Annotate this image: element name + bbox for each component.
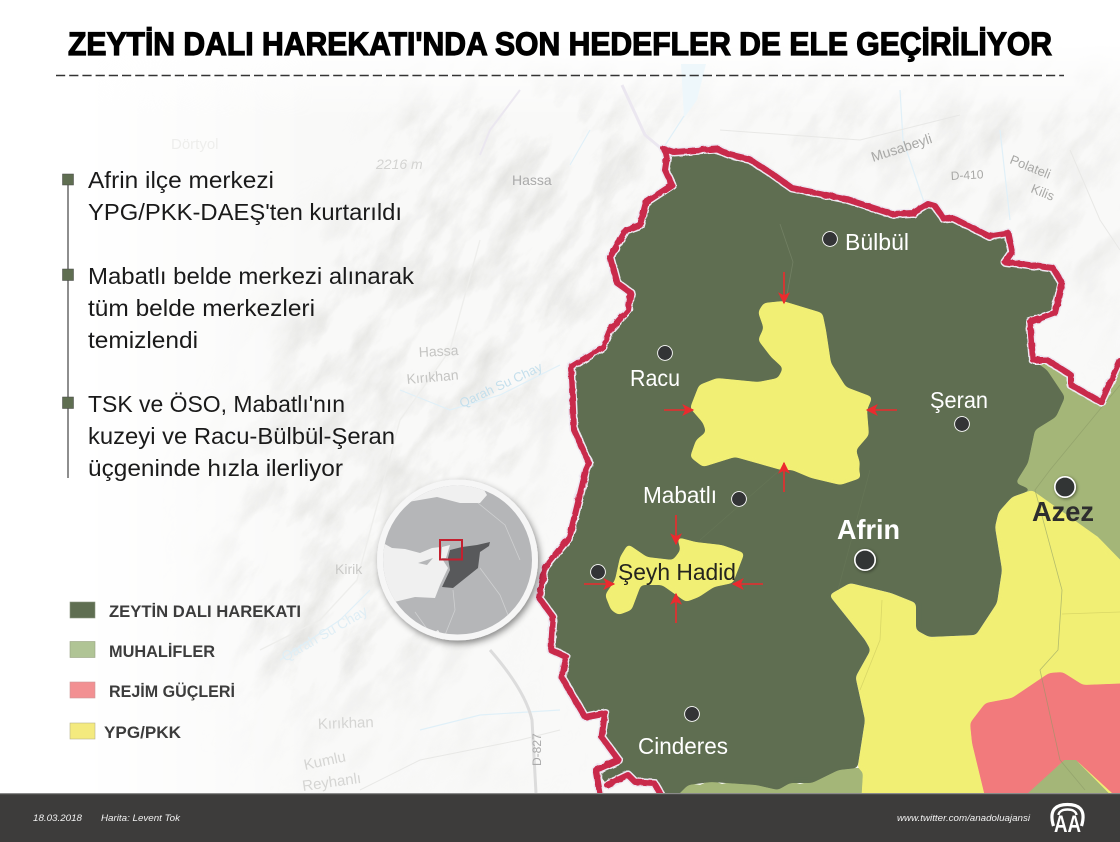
faint place names: Qarah Su Chay — [278, 602, 370, 665]
bullet: TSK and ÖSO: TSK ve ÖSO, Mabatlı'nın — [88, 391, 345, 417]
legend: YPG/PKK — [104, 723, 182, 742]
settlement labels: Mabatlı — [643, 482, 717, 508]
faint place names: Qarah Su Chay — [457, 359, 545, 411]
bullet: Mabatlı: tüm belde merkezleri — [88, 295, 315, 321]
settlement labels — [618, 229, 1094, 759]
footer date and credit: www.twitter.com/anadoluajansi — [897, 813, 1031, 824]
bullet: TSK and ÖSO: üçgeninde hızla ilerliyor — [88, 455, 343, 481]
faint place names: Kumlu — [302, 748, 347, 774]
inset locator globe — [370, 470, 538, 645]
faint place names: D-410 — [950, 167, 984, 183]
faint place names: 2216 m — [375, 156, 423, 172]
faint place names: Kırıkhan — [406, 367, 459, 387]
map background — [172, 64, 1120, 793]
red advance arrows — [584, 272, 897, 623]
settlement labels: Şeyh Hadid — [618, 559, 736, 585]
title divider — [56, 74, 1064, 76]
icon: Anadolu Agency logo: AA — [1054, 811, 1081, 838]
faint place names: Musabeyli — [869, 130, 934, 165]
bullet: TSK and ÖSO: kuzeyi ve Racu-Bülbül-Şeran — [88, 423, 395, 449]
footer date and credit: 18.03.2018 — [33, 813, 83, 824]
bullet: TSK and ÖSO — [62, 391, 395, 481]
area: yellow pocket south — [605, 537, 744, 615]
bullet list — [62, 167, 415, 481]
faint place names: Kirik — [335, 561, 363, 577]
faint place names: Kilis — [1029, 181, 1057, 204]
area: YPG/PKK east — [829, 490, 1120, 805]
area: muhalifler — [668, 360, 1120, 800]
icon: Anadolu Agency logo — [1052, 804, 1083, 838]
faint place names: Dörtyol — [171, 136, 219, 153]
title: ZEYTİN DALI HAREKATI'NDA SON HEDEFLER DE ELE GEÇİRİLİYOR — [68, 26, 1052, 62]
faint place names: Kırıkhan — [318, 714, 374, 733]
legend: REJİM GÜÇLERİ — [109, 682, 235, 701]
area: rejim güçleri — [970, 672, 1120, 805]
area: zeytin dalı harekatı — [539, 149, 1065, 800]
settlement labels: Racu — [630, 365, 680, 391]
afrin region border — [539, 149, 1120, 800]
faint place names — [171, 130, 1057, 795]
area: muhalifler south-east pocket — [1027, 760, 1110, 794]
settlement labels: Bülbül — [845, 229, 909, 255]
bullet: Afrin center — [62, 167, 402, 225]
settlement labels: Afrin — [837, 514, 900, 545]
bullet: Mabatlı — [62, 263, 415, 353]
footer bar — [0, 793, 1120, 842]
water and roads — [260, 64, 1120, 793]
faint place names: Reyhanlı — [301, 770, 362, 795]
faint place names: D-827 — [530, 733, 544, 766]
settlement dots — [591, 232, 1075, 721]
bullet: Mabatlı: Mabatlı belde merkezi alınarak — [88, 263, 415, 289]
faint place names: Hassa — [512, 172, 552, 188]
settlement labels: Cinderes — [638, 733, 728, 759]
faint roads on map — [700, 224, 1120, 790]
settlement labels: Şeran — [930, 387, 988, 413]
area: yellow pocket north — [690, 301, 872, 485]
faint place names: Hassa — [418, 342, 459, 360]
settlement labels: Azez — [1032, 496, 1094, 527]
legend: MUHALİFLER — [109, 642, 215, 661]
footer date and credit — [33, 813, 1031, 824]
bullet: Afrin center: Afrin ilçe merkezi — [88, 167, 274, 193]
bullet: Afrin center: YPG/PKK-DAEŞ'ten kurtarıldı — [88, 199, 402, 225]
legend — [70, 602, 301, 742]
footer date and credit: Harita: Levent Tok — [101, 813, 181, 824]
faint place names: Polateli — [1008, 152, 1053, 182]
bullet: Mabatlı: temizlendi — [88, 327, 198, 353]
legend: ZEYTİN DALI HAREKATI — [109, 602, 301, 621]
